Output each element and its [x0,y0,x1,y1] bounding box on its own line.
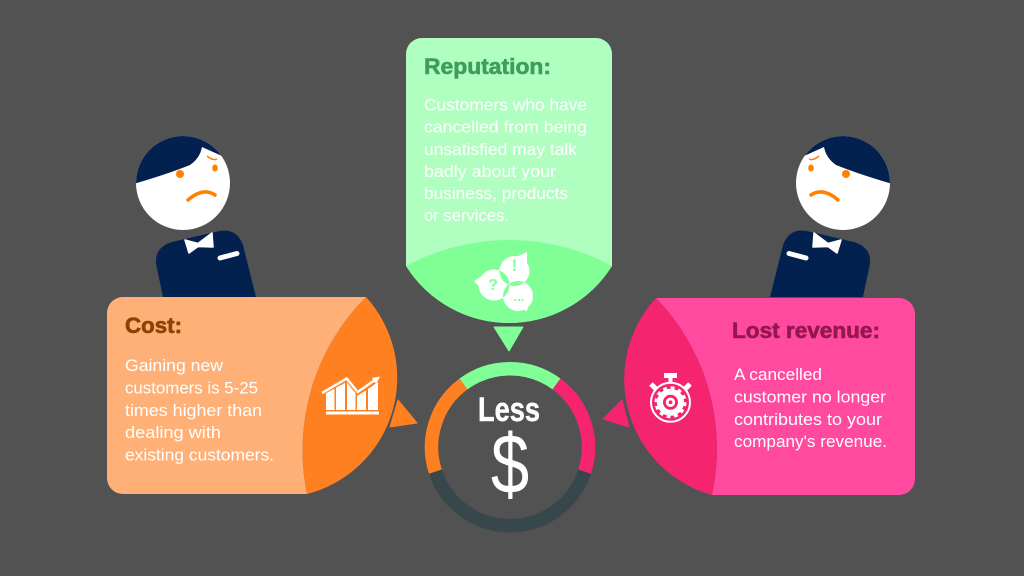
icon: speech bubbles: ... [514,289,524,304]
text: reputation body: Customers who have [424,96,587,114]
label: dollar sign: $ [491,418,529,512]
label: less: Less [478,391,540,429]
icon: speech bubbles: ? [488,277,498,294]
text: reputation body: badly about your [424,162,556,181]
panel body [107,297,366,494]
text: cost body: Gaining new [125,356,224,375]
panel lens [303,297,397,494]
panel body [406,38,612,323]
arrow: green [494,327,523,351]
text: lost revenue body: contributes to your [734,410,882,429]
text: cost body: times higher than [125,401,262,420]
heading: lost revenue: Lost revenue: [732,318,880,343]
text: reputation body: business, products [424,184,568,203]
text: lost revenue body: customer no longer [734,388,886,406]
ring segment: pink [556,384,588,472]
panel: reputation [406,38,612,323]
text: reputation body: or services. [424,206,509,225]
heading: cost: Cost: [125,313,182,338]
icon: stopwatch gear [651,373,690,422]
text: lost revenue body: A cancelled [734,365,822,384]
text: lost revenue body [734,365,887,451]
figure: right waiter [770,125,896,297]
icon: speech bubbles [474,252,533,311]
arrow: pink [603,400,629,427]
panel: lost revenue [624,298,915,495]
figure: left waiter [130,125,256,297]
text: reputation body: unsatisfied may talk [424,140,578,159]
panel body [656,298,915,495]
text: cost body: customers is 5-25 [125,378,258,398]
ring chart [432,369,588,526]
text: cost body [125,356,274,464]
ring segment: orange [432,384,464,472]
text: cost body: dealing with [125,423,221,442]
text: reputation body: cancelled from being [424,118,587,136]
ring segment: dark [435,472,585,526]
panel: cost [107,297,397,494]
text: lost revenue body: company's revenue. [734,432,887,451]
panel lens [624,298,717,495]
arrow: orange [390,400,417,427]
icon: growth chart [322,376,380,414]
ring segment: green [464,369,556,384]
heading: reputation: Reputation: [424,54,551,79]
icon: speech bubbles: ! [512,256,517,275]
text: cost body: existing customers. [125,446,274,464]
panel lens [406,240,612,323]
text: reputation body [424,96,587,225]
